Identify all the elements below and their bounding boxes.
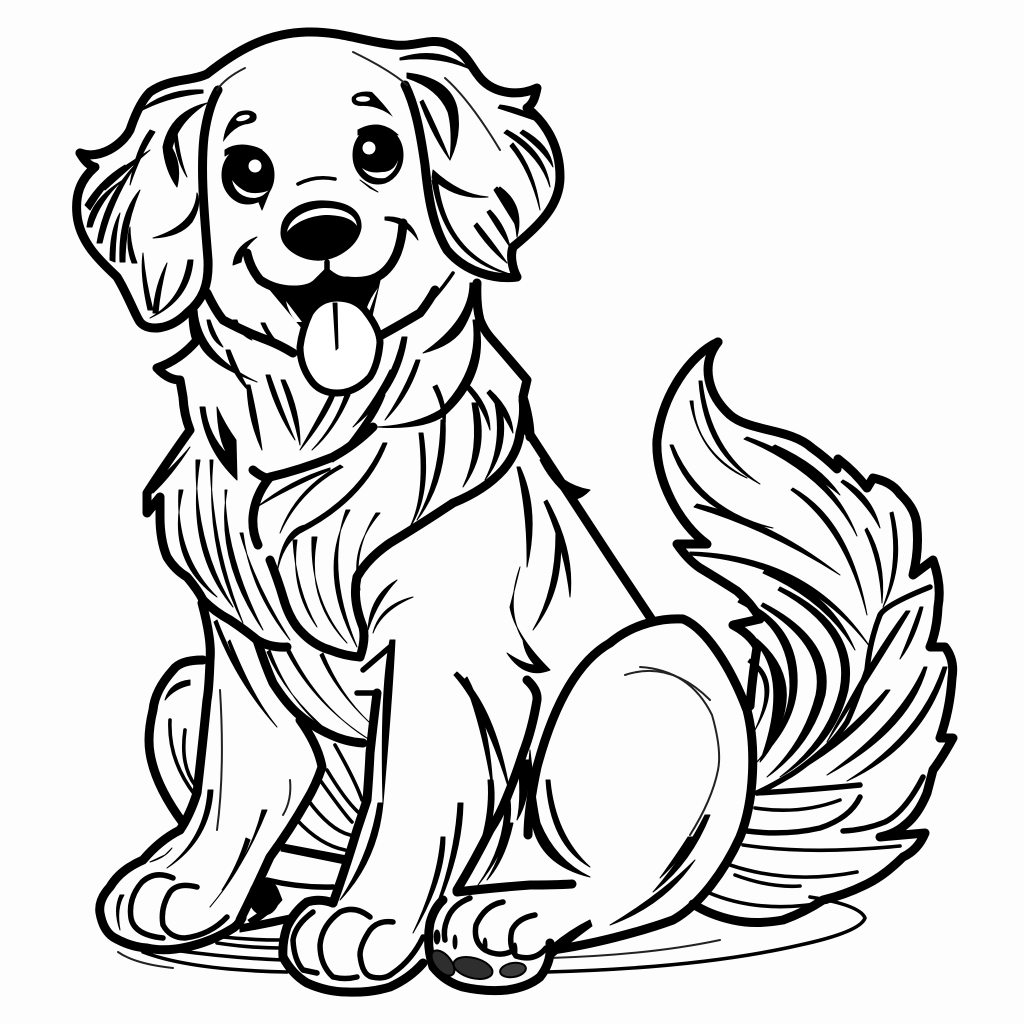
between legs	[240, 745, 362, 932]
ear left fur	[87, 180, 123, 227]
head top outline	[207, 32, 445, 90]
tail fur strokes	[670, 381, 947, 907]
paw front right	[283, 900, 423, 992]
ear left flap	[163, 103, 207, 187]
tail	[657, 342, 953, 922]
front leg left	[167, 603, 322, 920]
ears	[77, 43, 560, 328]
eye right	[353, 125, 403, 192]
brow left	[223, 110, 257, 142]
paw pads	[427, 946, 527, 983]
ground lines	[118, 897, 865, 972]
paw front left	[100, 830, 242, 950]
tail outline	[693, 342, 953, 922]
brow right	[352, 92, 393, 117]
ear left outline	[80, 74, 207, 155]
chest mane	[147, 283, 530, 743]
paw rear with pads	[427, 884, 592, 991]
nose	[281, 201, 361, 260]
neck outline right	[477, 283, 530, 437]
body fur	[368, 467, 571, 633]
face	[195, 92, 453, 393]
front leg right	[333, 567, 590, 933]
muzzle crease	[298, 178, 335, 184]
back line	[527, 430, 652, 620]
smile	[247, 223, 403, 290]
far hind haunch	[149, 660, 203, 823]
ear right flap	[407, 73, 458, 160]
chest swirl lower edge	[253, 427, 373, 545]
lower face fur	[207, 293, 293, 353]
mane fur strokes	[150, 337, 513, 740]
eye left	[222, 145, 274, 210]
tongue	[300, 298, 380, 393]
chest outline left	[147, 312, 203, 600]
ear right fur	[400, 54, 472, 70]
ear right outline	[405, 43, 560, 278]
rear thigh	[528, 619, 753, 950]
mouth interior	[262, 272, 381, 328]
